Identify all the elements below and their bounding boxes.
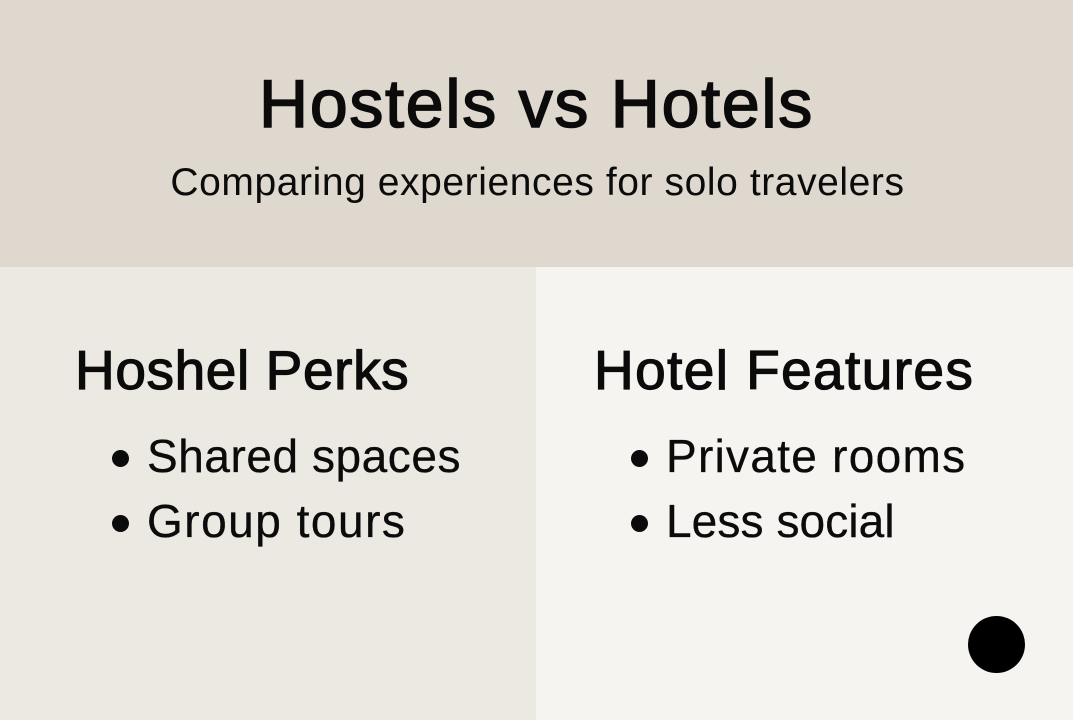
bullet: private rooms: Private rooms <box>666 430 966 482</box>
subtitle: Comparing experiences for solo travelers <box>170 161 905 204</box>
heading: hotel features: Hotel Features <box>594 339 974 401</box>
icon: black circle <box>968 616 1025 673</box>
title: Hostels vs Hotels <box>259 66 814 142</box>
bullet: shared spaces: Shared spaces <box>147 430 461 482</box>
heading: hostel perks: Hoshel Perks <box>75 339 409 401</box>
panel: hotel features <box>536 267 1073 720</box>
bullet: group tours: Group tours <box>147 495 406 547</box>
panel: hostel perks <box>0 267 536 720</box>
header panel <box>0 0 1073 267</box>
bullet: less social: Less social <box>666 495 895 547</box>
